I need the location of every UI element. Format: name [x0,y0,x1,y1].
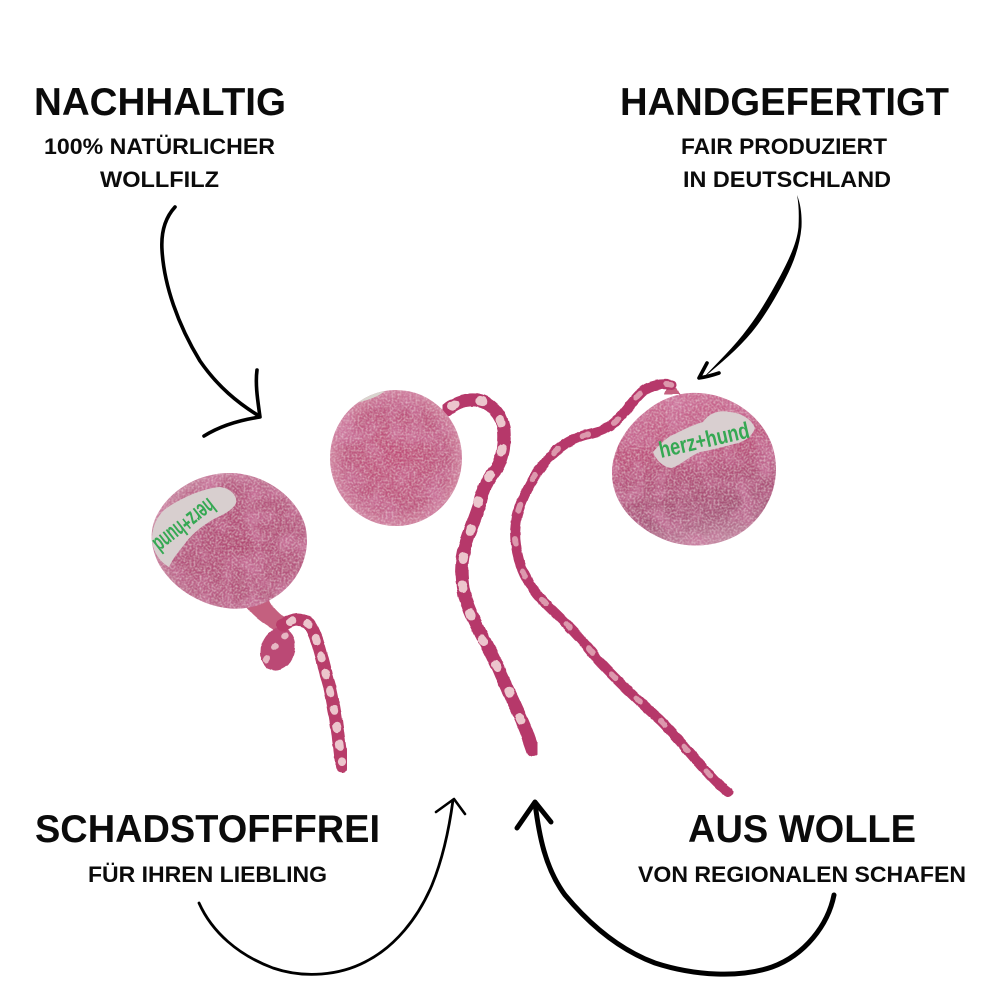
cord [515,381,728,792]
ball body [330,390,462,526]
text: 100% natürlicher: 100% NATÜRLICHER [44,134,275,159]
heading: Schadstofffrei: SCHADSTOFFFREI [35,808,380,851]
ball body [612,393,776,545]
logo text: herz+hund [148,492,221,558]
text: in Deutschland: IN DEUTSCHLAND [683,167,891,192]
cord and loop [242,598,342,766]
toy: middle felt ball [330,389,533,750]
ball body [152,473,307,609]
arrow: bottom left [199,799,465,974]
block: Aus Wolle [638,808,966,887]
label patch [653,411,755,468]
arrow: bottom right [517,802,834,974]
block: Handgefertigt [620,81,949,192]
heading: Handgefertigt: HANDGEFERTIGT [620,81,949,124]
text: Fair produziert: FAIR PRODUZIERT [681,134,888,159]
arrow: top left [162,207,260,436]
text: von regionalen Schafen: VON REGIONALEN SCHAFEN [638,862,966,887]
cord [447,400,533,750]
arrow: top right [699,195,802,378]
label patch [152,487,236,567]
heading: Aus Wolle: AUS WOLLE [688,808,916,851]
text: Wollfilz: WOLLFILZ [100,167,219,192]
block: Nachhaltig [34,81,286,192]
text: für Ihren Liebling: FÜR IHREN LIEBLING [88,862,327,887]
toy: right felt ball [515,381,776,792]
block: Schadstofffrei [35,808,380,887]
logo text: herz+hund [656,417,752,463]
label patch sliver [358,391,385,402]
toy: left felt ball [148,473,342,766]
heading: Nachhaltig: NACHHALTIG [34,81,286,124]
